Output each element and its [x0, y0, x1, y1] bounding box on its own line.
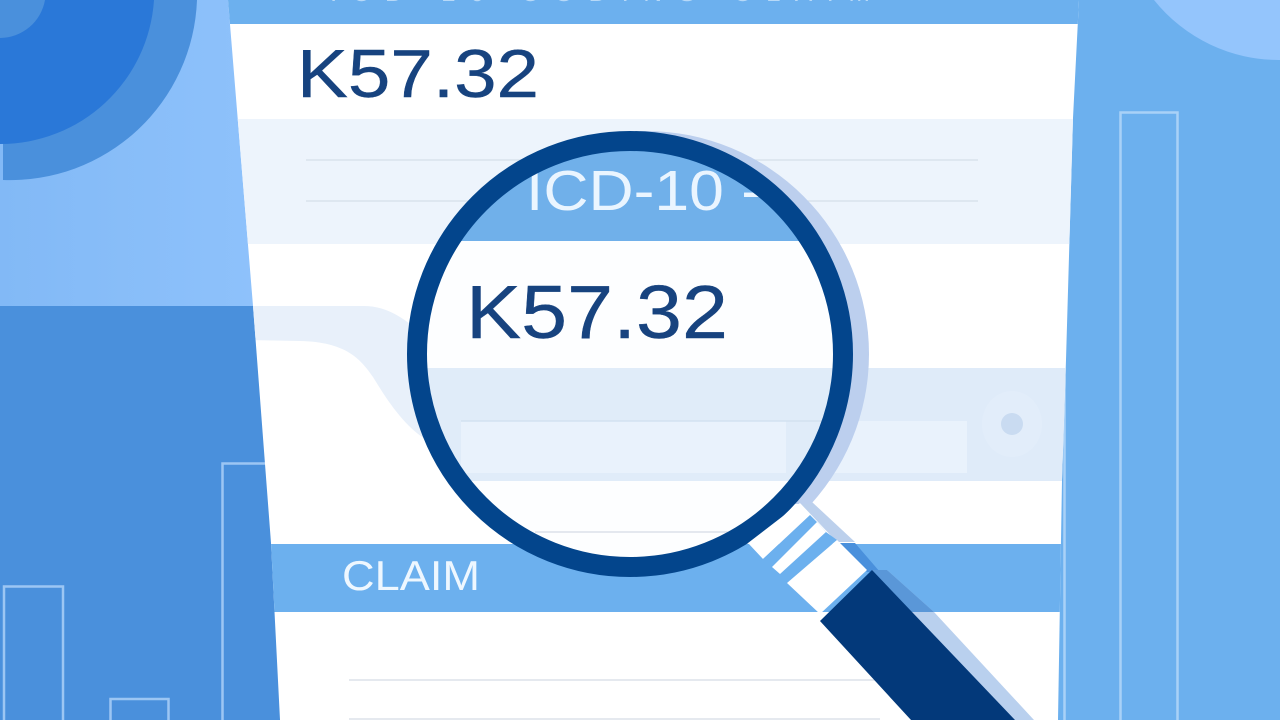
claim band: CLAIM: [342, 552, 480, 599]
bar chart: left outlined bars: [4, 464, 282, 720]
lens shadow: [640, 131, 869, 504]
collar: [748, 503, 867, 614]
pale curved ribbon: [250, 306, 430, 442]
panel: left background: [0, 0, 300, 720]
lower form lines: [349, 680, 880, 719]
lens ring: [417, 141, 843, 567]
lens text: ICD-10: ICD-10 -: [526, 159, 762, 223]
lens text: K57.32: K57.32: [466, 270, 728, 354]
panel: right background: [1060, 0, 1280, 720]
handle shadow: [800, 502, 1034, 720]
pale form row: [830, 368, 1066, 481]
magnifying glass: [417, 131, 1015, 720]
panel: claim document: [220, 0, 1090, 720]
bar chart: right outlined bar: [1064, 112, 1178, 720]
handle: [820, 570, 1015, 720]
lens form row: [426, 368, 834, 532]
pale section with lines: [220, 119, 1090, 244]
code text: K57.32: K57.32: [297, 36, 539, 112]
header band: [220, 0, 1090, 24]
claim band: [220, 544, 1090, 612]
icon: concentric circles top left: [0, 0, 197, 180]
lens interior: [426, 150, 834, 558]
